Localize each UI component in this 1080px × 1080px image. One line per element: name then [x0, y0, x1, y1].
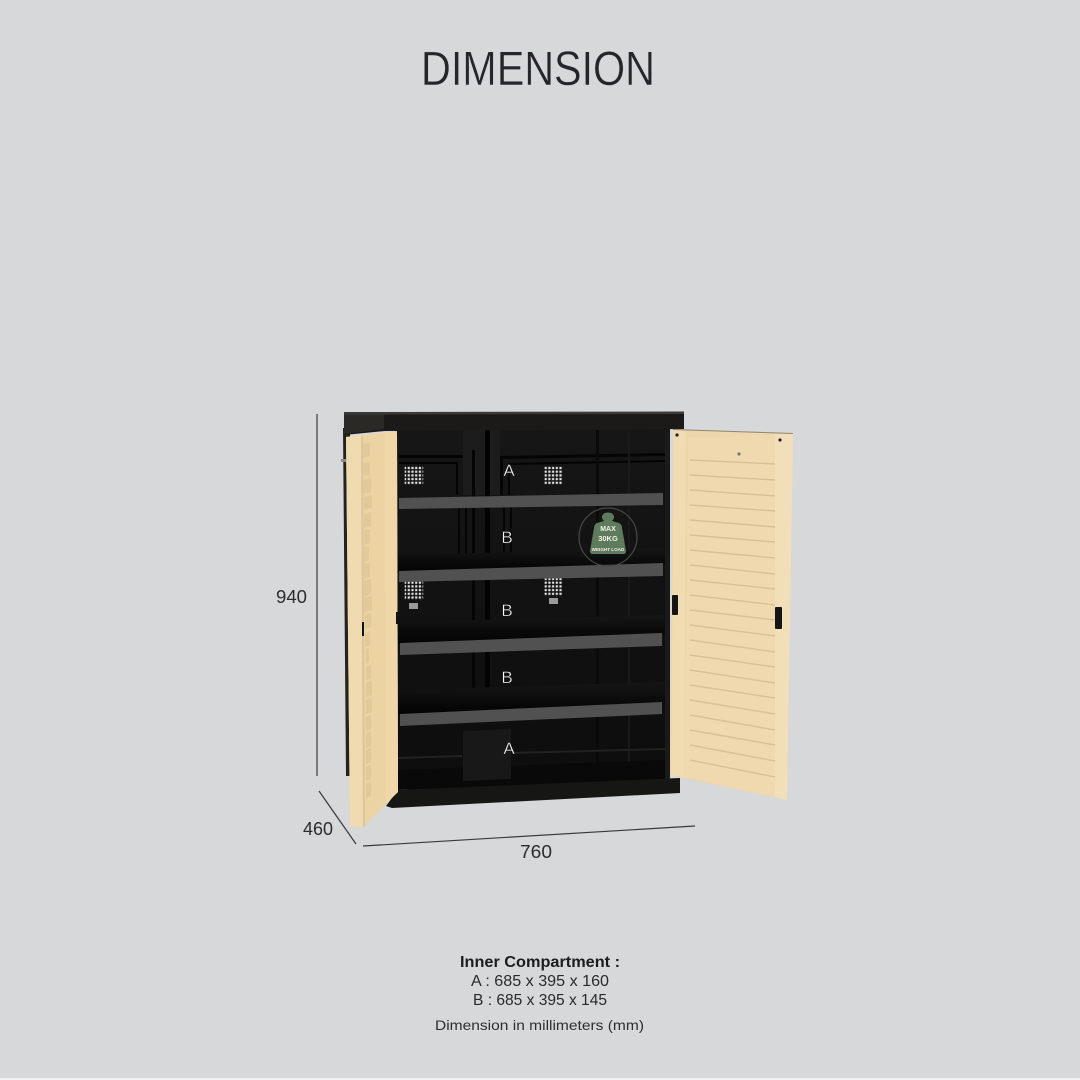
shelf 1	[399, 493, 663, 509]
width dimension line	[363, 826, 695, 846]
cabinet base	[386, 778, 680, 808]
bottom edge	[0, 1078, 1080, 1080]
shelf 2	[399, 563, 663, 582]
left door handle	[362, 622, 364, 636]
compartment labels: A	[503, 461, 515, 480]
vent dots lower right	[544, 578, 563, 596]
vent dots lower left	[405, 581, 423, 600]
vent dots top left	[405, 466, 423, 485]
cabinet left side	[343, 428, 352, 776]
vent dots top right	[544, 466, 563, 484]
cabinet back wall	[395, 428, 670, 788]
depth label: 460	[303, 819, 333, 839]
right door slats	[690, 460, 775, 777]
inner floors under shelves	[398, 548, 665, 790]
right door screws	[675, 433, 679, 437]
cabinet top panel	[344, 412, 684, 435]
width label: 760	[520, 842, 552, 862]
compartment A size: A : 685 x 395 x 160	[471, 973, 609, 990]
compartment labels	[501, 461, 515, 758]
weight badge	[579, 508, 637, 566]
weight text	[592, 526, 625, 552]
shelf 3	[400, 633, 662, 655]
units note: Dimension in millimeters (mm)	[435, 1017, 644, 1033]
compartment labels: A	[503, 739, 515, 758]
compartment labels: B	[501, 601, 513, 620]
shelf 4	[400, 702, 662, 726]
compartment labels: B	[501, 668, 513, 687]
compartment labels: B	[501, 528, 513, 547]
height dimension line	[316, 414, 318, 776]
title: DIMENSION	[421, 43, 655, 96]
small tag left	[409, 603, 418, 609]
weight text: MAX	[600, 526, 616, 533]
left door hinge pin	[341, 459, 346, 462]
inner compartment heading: Inner Compartment :	[460, 954, 620, 971]
weight text: 30KG	[598, 534, 618, 543]
left door slats	[363, 443, 372, 798]
right door handles	[672, 595, 678, 615]
weight text: WEIGHT LOAD	[592, 547, 625, 552]
height label: 940	[276, 587, 307, 607]
weight icon	[590, 512, 626, 554]
small tag right	[549, 598, 558, 604]
depth dimension line	[319, 791, 356, 844]
left door	[346, 431, 398, 827]
cabinet	[341, 412, 793, 827]
compartment B size: B : 685 x 395 x 145	[473, 992, 607, 1009]
right door	[670, 429, 793, 800]
